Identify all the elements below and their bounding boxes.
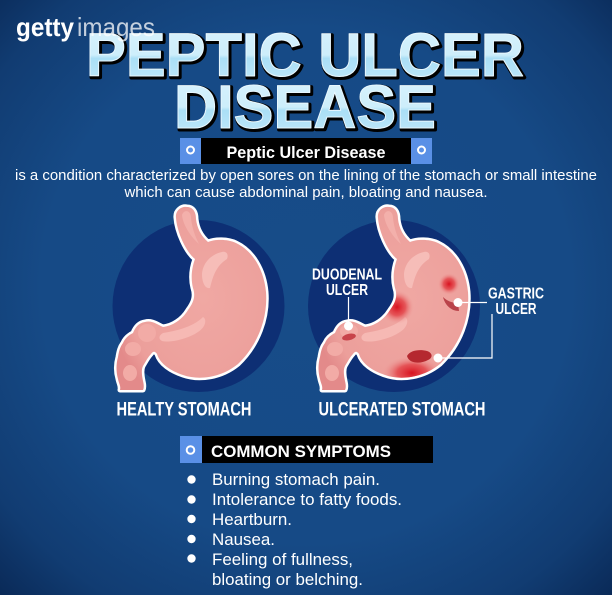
callout: duodenal ulcer: DUODENAL bbox=[312, 266, 382, 284]
symptoms list: Nausea. bbox=[212, 530, 275, 549]
watermark logo: getty bbox=[16, 12, 74, 42]
symptoms list bbox=[187, 470, 402, 589]
description: is a condition characterized by open sores on the lining of the stomach or small intestine bbox=[15, 167, 597, 184]
symptoms list: bloating or belching. bbox=[212, 570, 363, 589]
backdrop circle bbox=[308, 220, 480, 392]
callout: gastric ulcer bbox=[434, 286, 544, 362]
subtitle banner bbox=[180, 138, 432, 164]
callout: duodenal ulcer bbox=[312, 266, 382, 330]
title: PEPTIC ULCER bbox=[88, 22, 526, 90]
title: DISEASE bbox=[174, 73, 436, 141]
callout: gastric ulcer: ULCER bbox=[496, 301, 537, 318]
callout: gastric ulcer: GASTRIC bbox=[488, 286, 544, 302]
symptoms list: Heartburn. bbox=[212, 510, 292, 529]
watermark logo bbox=[16, 12, 155, 42]
description: which can cause abdominal pain, bloating and nausea. bbox=[124, 184, 488, 201]
symptoms heading bbox=[180, 436, 433, 463]
symptoms list: Intolerance to fatty foods. bbox=[212, 490, 402, 509]
title: PEPTIC ULCER bbox=[86, 21, 524, 89]
title bbox=[86, 21, 526, 142]
callout: duodenal ulcer: ULCER bbox=[326, 282, 368, 299]
panel: healthy stomach bbox=[112, 207, 284, 420]
symptoms list: Feeling of fullness, bbox=[212, 550, 353, 569]
watermark logo: images bbox=[77, 12, 155, 42]
title: DISEASE bbox=[176, 74, 438, 142]
label: ulcerated stomach: ULCERATED STOMACH bbox=[318, 398, 486, 420]
symptoms heading: COMMON SYMPTOMS bbox=[211, 442, 391, 461]
panel: ulcerated stomach bbox=[308, 207, 544, 420]
symptoms list: Burning stomach pain. bbox=[212, 470, 380, 489]
icon: healthy stomach bbox=[116, 207, 266, 390]
subtitle banner: Peptic Ulcer Disease bbox=[226, 144, 386, 162]
label: healthy stomach: HEALTY STOMACH bbox=[116, 398, 252, 420]
description bbox=[15, 167, 597, 201]
backdrop circle bbox=[112, 220, 284, 392]
icon: ulcerated stomach bbox=[318, 207, 468, 390]
